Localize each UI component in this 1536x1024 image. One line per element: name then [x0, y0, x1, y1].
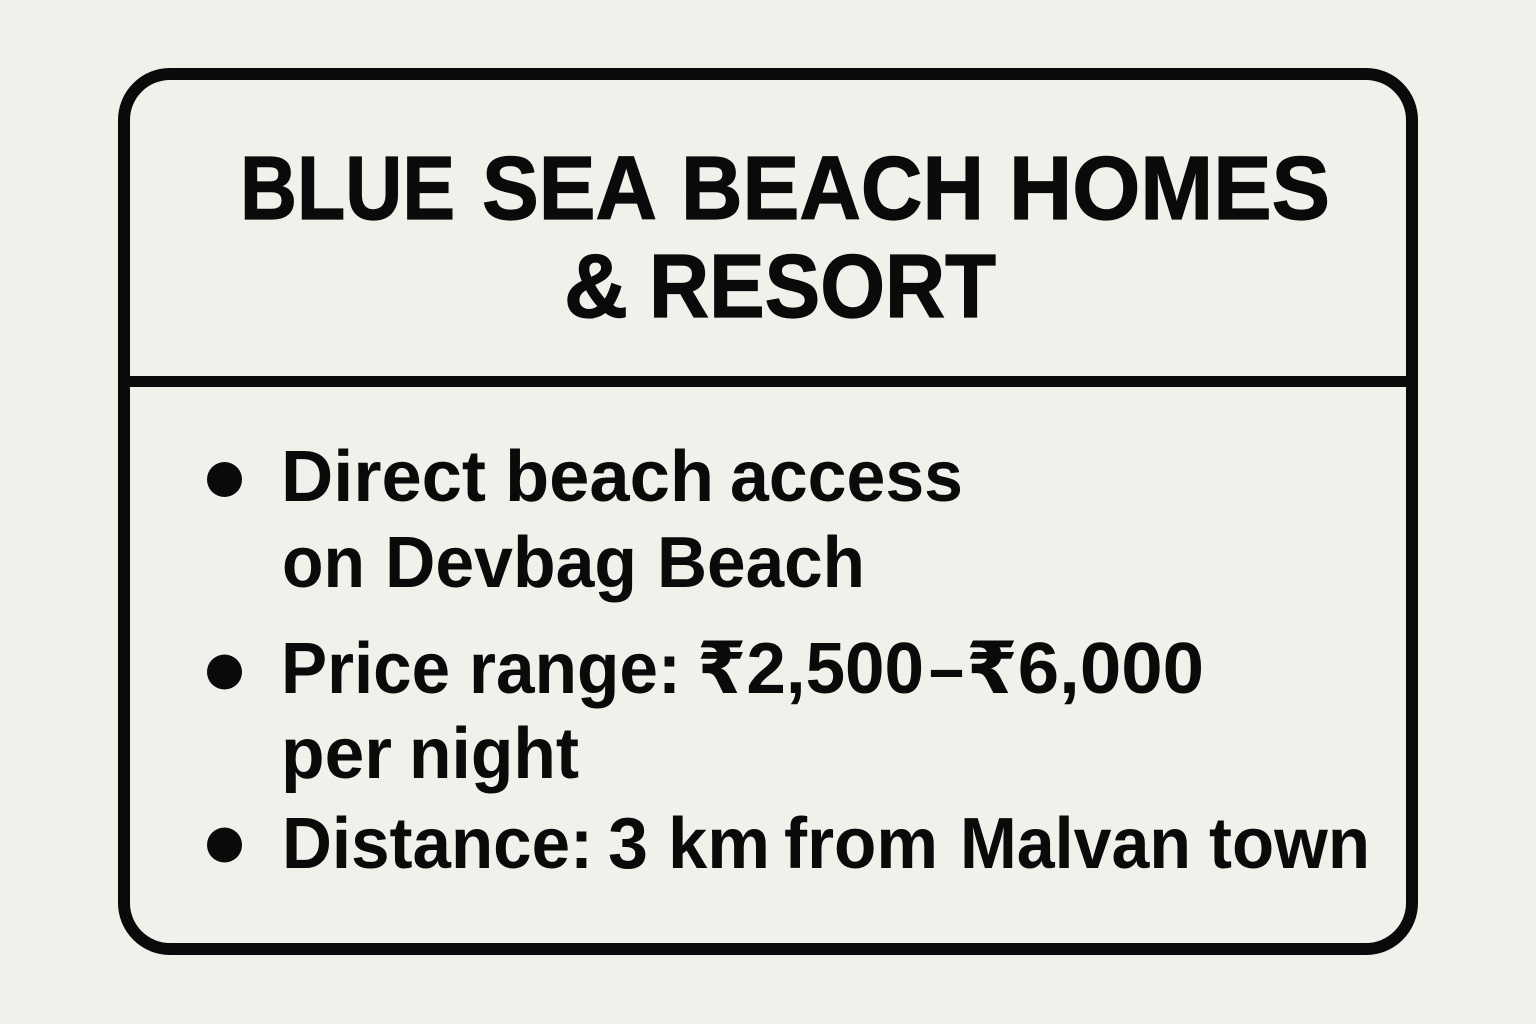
bullet item: distance: from	[784, 804, 938, 884]
bullet item: price range: ₹2,500	[697, 629, 924, 709]
bullet item: price range: range:	[469, 629, 681, 709]
bullet item: price range: night	[409, 714, 579, 794]
title: SEA	[482, 139, 657, 239]
bullet item: distance	[207, 804, 1370, 884]
title: HOMES	[1009, 139, 1330, 239]
title: BLUE	[240, 139, 455, 239]
bullet item: price range: –	[929, 629, 964, 709]
title: RESORT	[649, 237, 996, 337]
panel: card frame	[124, 74, 1412, 949]
title: BEACH	[681, 139, 984, 239]
bullet item: beach access: beach	[505, 437, 714, 517]
bullet item: distance: km	[668, 804, 770, 884]
bullet item: beach access: access	[730, 437, 963, 517]
bullet item: price range: per	[281, 714, 392, 794]
bullet item: price range	[207, 629, 1204, 794]
bullet item: beach access: Devbag	[385, 523, 637, 603]
title	[240, 139, 1330, 337]
bullet item: distance: Malvan	[960, 804, 1191, 884]
bullet item: price range: Price	[281, 629, 450, 709]
bullet list	[207, 437, 1370, 884]
bullet item: beach access: Beach	[657, 523, 865, 603]
divider	[124, 376, 1412, 387]
bullet item: price range: ₹6,000	[966, 629, 1204, 709]
bullet item: distance: Distance:	[282, 804, 593, 884]
bullet item: distance: town	[1209, 804, 1370, 884]
bullet item: beach access	[207, 437, 963, 603]
bullet item: beach access: Direct	[281, 437, 486, 517]
bullet item: distance: 3	[608, 804, 648, 884]
title: &	[564, 237, 628, 337]
bullet item: beach access: on	[282, 523, 365, 603]
